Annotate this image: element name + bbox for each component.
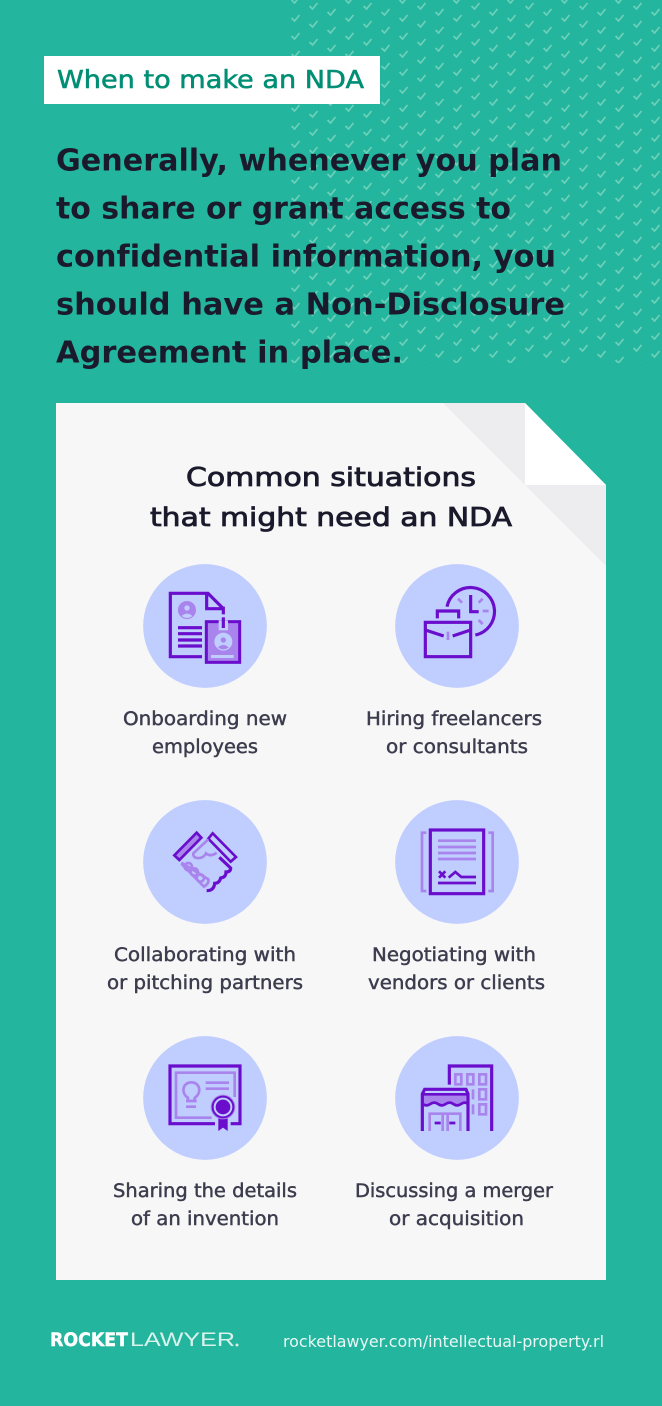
label: Discussing a merger [355,1181,553,1202]
label: or pitching partners [107,973,303,994]
headline: should have a Non-Disclosure [56,288,565,322]
label: vendors or clients [368,973,545,994]
icon: briefcase and clock [395,564,519,688]
logo: Rocket Lawyer: ROCKET [50,1329,128,1351]
card heading: Common situations [186,463,476,493]
label: or acquisition [389,1209,524,1230]
label [366,709,542,758]
icon: invention certificate [143,1036,267,1160]
label: Hiring freelancers [366,709,542,730]
icon: handshake [143,800,267,924]
card heading: that might need an NDA [150,503,513,533]
label [123,709,287,758]
logo: Rocket Lawyer [50,1329,238,1351]
label: of an invention [131,1209,279,1230]
headline: confidential information, you [56,240,556,274]
headline: Agreement in place. [56,336,403,370]
logo: Rocket Lawyer: LAWYER [130,1329,235,1351]
icon: shop and office tower [395,1036,519,1160]
panel: document card [56,403,606,1280]
label: or consultants [386,737,528,758]
tag: When to make an NDA: When to make an NDA [57,65,364,94]
label: Sharing the details [113,1181,297,1202]
label [355,1181,553,1230]
label: Collaborating with [114,945,296,966]
icon: contract [395,800,519,924]
footer url: rocketlawyer.com/intellectual-property.rl [283,1332,604,1351]
label: employees [152,737,258,758]
label: Negotiating with [372,945,536,966]
label: Onboarding new [123,709,287,730]
tag: When to make an NDA [44,56,380,104]
label [113,1181,297,1230]
headline: to share or grant access to [56,192,511,226]
headline: Generally, whenever you plan [56,144,562,178]
label [368,945,545,994]
icon: onboarding documents and badge [143,564,267,688]
card heading [150,463,513,533]
label [107,945,303,994]
headline [56,144,565,370]
